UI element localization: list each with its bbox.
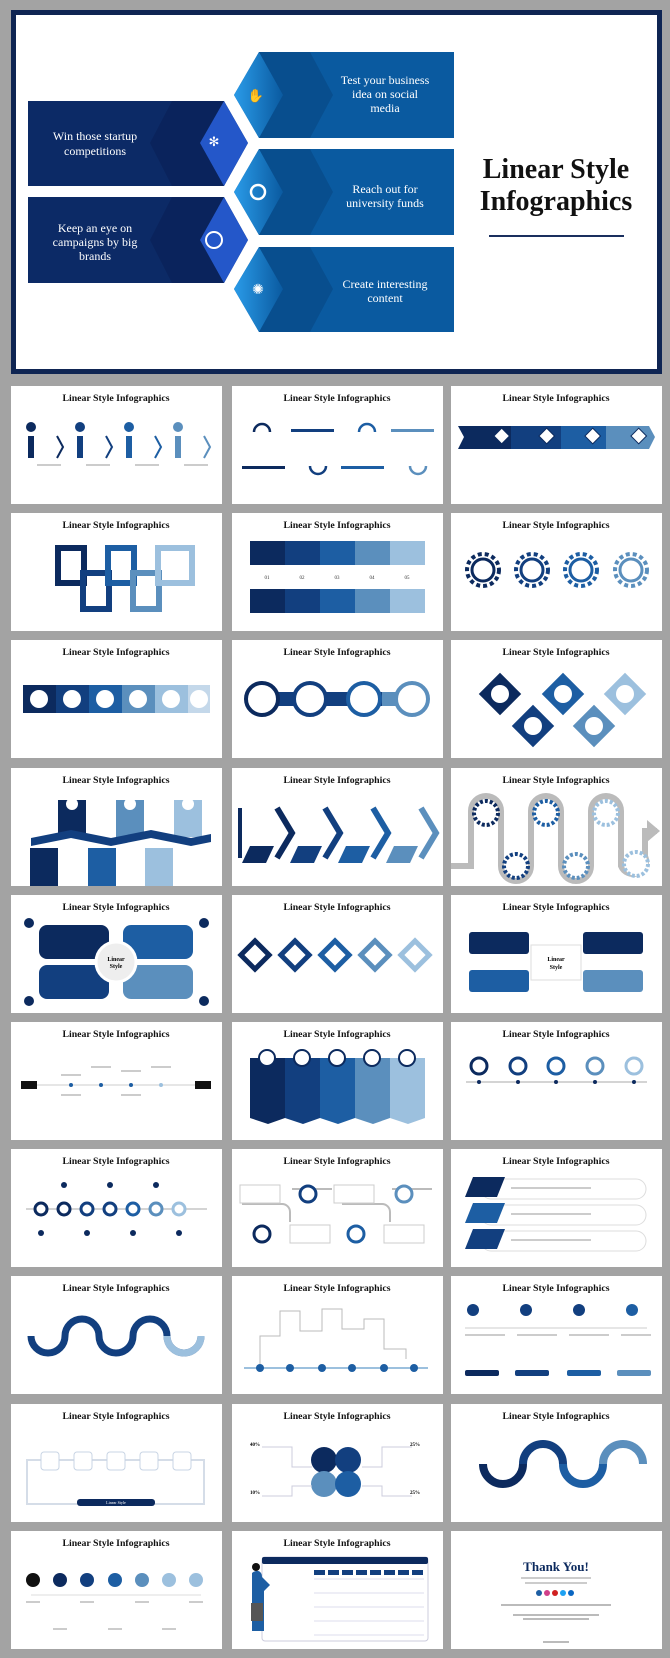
- thumb 19: timeline circles: Linear Style Infographics: [62, 1156, 170, 1167]
- right box: content: Create interesting: [343, 277, 427, 291]
- right box: social media: ✋: [248, 88, 264, 103]
- right box: university funds: Reach out for: [352, 182, 418, 196]
- thumb 26: clover: 10%: [250, 1491, 260, 1496]
- right box: university funds: [234, 149, 454, 235]
- thumb 26: clover: [232, 1404, 443, 1522]
- thumb 5: column table: 03: [334, 576, 340, 581]
- title underline: [489, 235, 624, 237]
- thumb 25: five boxes: [11, 1404, 222, 1522]
- thumb 21: parallelograms: Linear Style Infographics: [502, 1156, 610, 1167]
- thumb 20: pieces with curved lines: Linear Style Infographics: [283, 1156, 391, 1167]
- left box: startup competitions: Win those startup: [53, 129, 137, 143]
- thumb 29: calendar: [232, 1531, 443, 1649]
- title: Infographics: [480, 186, 632, 217]
- thumb 27: S arcs: Linear Style Infographics: [502, 1411, 610, 1422]
- thumb 15: boxes with center: Style: [550, 965, 563, 971]
- thumb 16: timeline: [11, 1022, 222, 1140]
- thumb 12: road with gears: [451, 768, 662, 886]
- thumb 14: diamonds row: [232, 895, 443, 1013]
- thumb 8: joined circles: [232, 640, 443, 758]
- thumb 2: cards with arcs: Linear Style Infographics: [283, 393, 391, 404]
- thumb 15: boxes with center: Linear: [547, 957, 565, 963]
- right box: social media: Test your business: [341, 73, 430, 87]
- hero slide: [11, 10, 662, 374]
- left box: campaigns: Keep an eye on: [58, 221, 132, 235]
- thumb 26: clover: 25%: [410, 1443, 420, 1448]
- right box: social media: [234, 52, 454, 138]
- thumb 1: steps with chevrons: [11, 386, 222, 504]
- thumb 9: diamonds: [451, 640, 662, 758]
- thumb 10: zigzag ribbon: [11, 768, 222, 886]
- thumb 29: calendar: Linear Style Infographics: [283, 1538, 391, 1549]
- thumb 6: gears: Linear Style Infographics: [502, 520, 610, 531]
- thumb 7: circles band: [11, 640, 222, 758]
- thumb 25: five boxes: Linear Style Infographics: [62, 1411, 170, 1422]
- thumb 28: hexagon timeline: Linear Style Infographics: [62, 1538, 170, 1549]
- thumb 13: quadrants: Linear: [107, 957, 125, 963]
- thumb 20: pieces with curved lines: [232, 1149, 443, 1267]
- thumb 5: column table: 05: [404, 576, 410, 581]
- title: Linear Style: [483, 154, 629, 185]
- thumb 14: diamonds row: Linear Style Infographics: [283, 902, 391, 913]
- thumb 11: chevrons: [232, 768, 443, 886]
- thumb 13: quadrants: Style: [110, 964, 123, 970]
- thumb 3: arrow band: [451, 386, 662, 504]
- thumb 5: column table: Linear Style Infographics: [283, 520, 391, 531]
- right box: university funds: university funds: [346, 196, 424, 210]
- thumb 22: wave: Linear Style Infographics: [62, 1283, 170, 1294]
- thumb 26: clover: Linear Style Infographics: [283, 1411, 391, 1422]
- right box: content: content: [367, 291, 403, 305]
- thumb 26: clover: 25%: [410, 1491, 420, 1496]
- thumb 13: quadrants: Linear Style Infographics: [62, 902, 170, 913]
- left box: startup competitions: [28, 101, 248, 186]
- thumb 23: staircase: [232, 1276, 443, 1394]
- thumb 9: diamonds: Linear Style Infographics: [502, 647, 610, 658]
- left box: startup competitions: ✻: [209, 134, 219, 149]
- thumb 26: clover: 40%: [250, 1443, 260, 1448]
- right box: content: [234, 247, 454, 332]
- thumb 3: arrow band: Linear Style Infographics: [502, 393, 610, 404]
- right box: social media: idea on social: [352, 87, 419, 101]
- thumb 5: column table: 04: [370, 576, 375, 581]
- thumb 11: chevrons: Linear Style Infographics: [283, 775, 391, 786]
- left box: campaigns: campaigns by big: [53, 235, 137, 249]
- left box: campaigns: brands: [79, 249, 111, 263]
- thumb 15: boxes with center: [451, 895, 662, 1013]
- thumb 25: five boxes: Linear Style: [106, 1500, 126, 1505]
- thumb 30: thank you: Thank You!: [523, 1559, 589, 1574]
- thumb 24: hexagons years: [451, 1276, 662, 1394]
- thumb 16: timeline: Linear Style Infographics: [62, 1029, 170, 1040]
- thumb 4: leaf chain: [11, 513, 222, 631]
- thumb 10: zigzag ribbon: Linear Style Infographics: [62, 775, 170, 786]
- thumb 17: columns with zigzag: Linear Style Infographics: [283, 1029, 391, 1040]
- thumb 23: staircase: Linear Style Infographics: [283, 1283, 391, 1294]
- thumb 5: column table: [232, 513, 443, 631]
- thumb 24: hexagons years: Linear Style Infographics: [502, 1283, 610, 1294]
- title: [480, 154, 632, 217]
- thumb 15: boxes with center: Linear Style Infographics: [502, 902, 610, 913]
- thumb 8: joined circles: Linear Style Infographics: [283, 647, 391, 658]
- left box: startup competitions: competitions: [64, 144, 126, 158]
- left box: campaigns: [28, 197, 248, 283]
- thumb 27: S arcs: [451, 1404, 662, 1522]
- thumb 18: circles on line: [451, 1022, 662, 1140]
- thumb 5: column table: 02: [300, 576, 305, 581]
- right box: content: ✺: [252, 283, 264, 298]
- thumb 17: columns with zigzag: [232, 1022, 443, 1140]
- thumb 4: leaf chain: Linear Style Infographics: [62, 520, 170, 531]
- thumb 1: steps with chevrons: Linear Style Infographics: [62, 393, 170, 404]
- thumb 19: timeline circles: [11, 1149, 222, 1267]
- right box: social media: media: [370, 101, 400, 115]
- thumb 22: wave: [11, 1276, 222, 1394]
- thumb 21: parallelograms: [451, 1149, 662, 1267]
- thumb 13: quadrants: [11, 895, 222, 1013]
- thumb 7: circles band: Linear Style Infographics: [62, 647, 170, 658]
- thumb 5: column table: 01: [264, 576, 270, 581]
- thumb 12: road with gears: Linear Style Infographics: [502, 775, 610, 786]
- thumb 28: hexagon timeline: [11, 1531, 222, 1649]
- thumb 6: gears: [451, 513, 662, 631]
- thumb 2: cards with arcs: [232, 386, 443, 504]
- thumb 30: thank you: [451, 1531, 662, 1649]
- thumb 18: circles on line: Linear Style Infographics: [502, 1029, 610, 1040]
